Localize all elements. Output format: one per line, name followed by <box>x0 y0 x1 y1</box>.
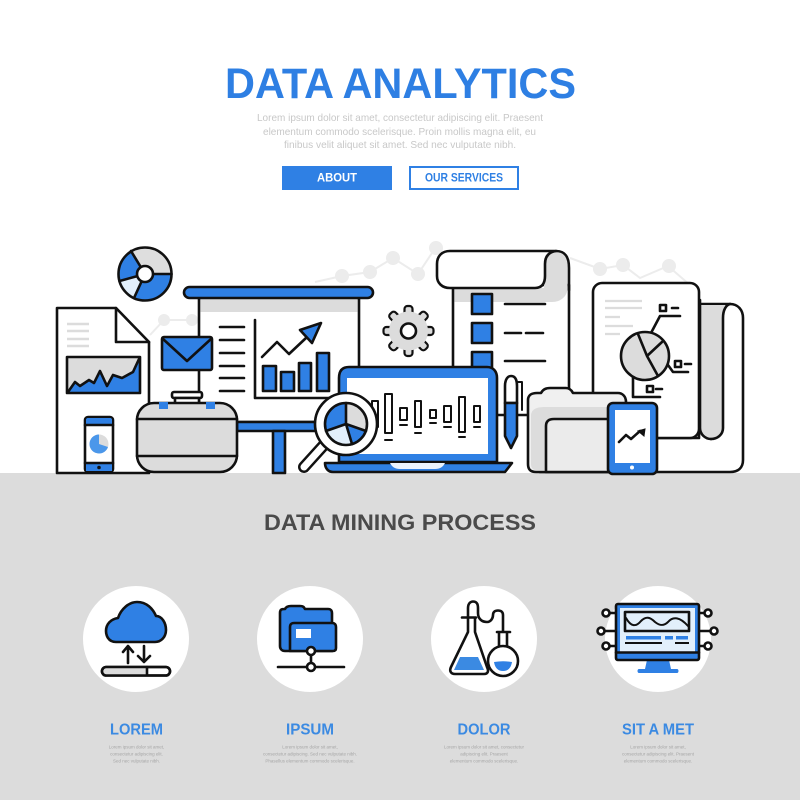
scroll checklist <box>437 251 569 415</box>
report sheet with pie chart <box>540 283 743 472</box>
button: our services <box>410 167 518 189</box>
briefcase <box>137 392 237 472</box>
icon: envelope <box>162 337 212 370</box>
button: about: ABOUT <box>317 170 358 184</box>
section heading: DATA MINING PROCESS <box>264 510 536 535</box>
laptop with candlestick chart <box>325 367 512 472</box>
step 4 label: consectetur adipiscing elit. Praesent <box>622 752 695 756</box>
step 2 label: Phasellus elementum commodo scelerisque. <box>265 758 355 764</box>
step 3 label: DOLOR <box>458 722 510 738</box>
icon: tablet <box>608 403 657 474</box>
step 3 label: elementum commodo scelerisque. <box>450 758 518 764</box>
step 3 label: Lorem ipsum dolor sit amet, consectetur <box>444 744 525 750</box>
step 2 label: Lorem ipsum dolor sit amet, <box>282 744 338 750</box>
icon: pen <box>505 376 522 448</box>
icon: phone <box>85 417 113 472</box>
icon: donut chart <box>118 247 172 300</box>
background line chart watermark <box>150 242 690 335</box>
step 4 label: SIT A MET <box>622 722 694 738</box>
step 4 label: Lorem ipsum dolor sit amet, <box>630 744 686 750</box>
step 1 label: Sed nec vulputate nibh. <box>113 758 160 764</box>
step 4: monitor with circuit <box>598 586 718 692</box>
step 1 label: Lorem ipsum dolor sit amet, <box>109 744 164 750</box>
step 1: cloud transfer <box>83 586 189 692</box>
intro paragraph: Lorem ipsum dolor sit amet, consectetur adipiscing elit. Praesent <box>257 112 543 124</box>
folder <box>528 388 626 472</box>
presentation board <box>184 287 373 473</box>
icon: gear <box>384 306 434 356</box>
step 1 label: consectetur adipiscing elit. <box>110 752 163 756</box>
step 2 label: consectetur adipiscing. Sed nec vulputate nibh. <box>263 752 357 756</box>
document with area chart <box>57 308 149 473</box>
step 4 label: elementum commodo scelerisque. <box>624 758 692 764</box>
step 1 label <box>109 722 164 764</box>
button: our services: OUR SERVICES <box>425 170 503 184</box>
step 3 label <box>444 722 525 764</box>
step 3: lab flasks <box>431 586 537 692</box>
step 3 label: adipiscing elit. Praesent <box>460 752 509 756</box>
button: about <box>282 166 392 190</box>
intro paragraph <box>257 112 543 151</box>
step 2: network folder <box>257 586 363 692</box>
intro paragraph: elementum commodo scelerisque. Proin mollis magna elit, eu <box>263 126 536 138</box>
icon: magnifying glass <box>304 393 377 467</box>
step 4 label <box>622 722 695 764</box>
step 2 label <box>263 722 357 764</box>
gray lower panel <box>0 473 800 800</box>
intro paragraph: finibus velit aliquet sit amet. Sed nec vulputate nibh. <box>284 139 516 151</box>
step 2 label: IPSUM <box>286 722 334 738</box>
step 1 label: LOREM <box>110 722 163 738</box>
title: DATA ANALYTICS <box>225 60 576 108</box>
